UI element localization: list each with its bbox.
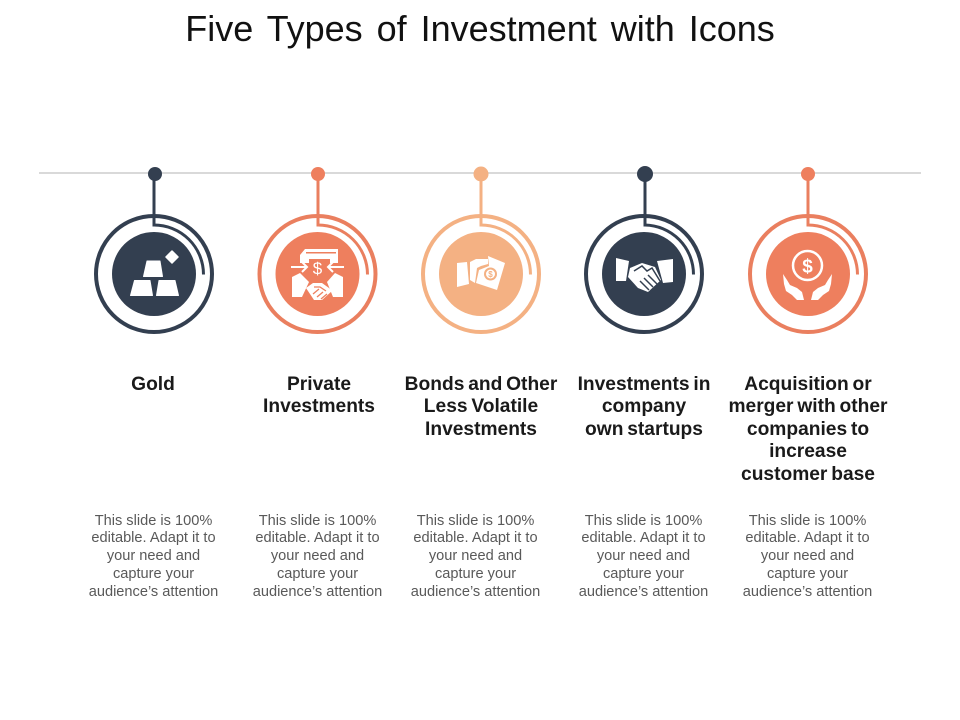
text: bonds description: your need and	[429, 548, 522, 564]
heading: startups	[578, 374, 710, 440]
text: bonds description	[411, 512, 540, 600]
heading: private investments	[263, 374, 375, 417]
text: gold description	[89, 512, 218, 600]
icon: handshake	[616, 258, 673, 292]
text: bonds description: editable. Adapt it to	[413, 530, 538, 546]
title: Five Types of Investment with Icons	[185, 8, 775, 49]
text: acquisition description: audience’s attention	[743, 584, 872, 600]
text: gold description: audience’s attention	[89, 584, 218, 600]
heading: acquisition: merger with other	[728, 396, 888, 417]
heading: startups: company	[602, 396, 686, 417]
node: gold	[96, 167, 212, 332]
text: startups description: audience’s attention	[579, 584, 708, 600]
heading: acquisition: Acquisition or	[744, 374, 872, 395]
heading: acquisition	[728, 374, 888, 485]
icon: gold bars	[130, 251, 178, 296]
text: private description: your need and	[271, 548, 364, 564]
node: bonds	[423, 166, 539, 332]
text: bonds description: This slide is 100%	[417, 512, 534, 528]
icon: hands holding dollar coin: $	[802, 256, 813, 278]
text: acquisition description	[743, 512, 872, 600]
heading: acquisition: increase	[769, 441, 847, 462]
heading: bonds: Less Volatile	[424, 396, 538, 417]
heading: bonds: Investments	[425, 419, 537, 440]
heading: private investments: Investments	[263, 396, 375, 417]
text: startups description	[579, 512, 708, 600]
text: private description: editable. Adapt it to	[255, 530, 380, 546]
text: private description: audience’s attention	[253, 584, 382, 600]
text: private description: capture your	[277, 566, 358, 582]
text: acquisition description: editable. Adapt it to	[745, 530, 870, 546]
text: gold description: editable. Adapt it to	[91, 530, 216, 546]
heading: bonds	[405, 374, 558, 440]
heading: startups: Investments in	[578, 374, 710, 395]
text: startups description: This slide is 100%	[585, 512, 702, 528]
text: private description	[253, 512, 382, 600]
node: private investments	[260, 167, 376, 332]
text: startups description: your need and	[597, 548, 690, 564]
node: acquisition	[750, 167, 866, 332]
text: private description: This slide is 100%	[259, 512, 376, 528]
heading: private investments: Private	[287, 374, 351, 395]
heading: acquisition: companies to	[747, 419, 869, 440]
timeline line	[39, 172, 921, 174]
heading: startups: own startups	[585, 419, 703, 440]
text: acquisition description: This slide is 100%	[749, 512, 866, 528]
text: gold description: your need and	[107, 548, 200, 564]
heading: acquisition: customer base	[741, 464, 875, 485]
text: startups description: capture your	[603, 566, 684, 582]
icon: deal with money	[291, 249, 344, 300]
icon: hand with banknote	[457, 256, 505, 290]
text: startups description: editable. Adapt it to	[581, 530, 706, 546]
heading: bonds: Bonds and Other	[405, 374, 557, 395]
text: acquisition description: your need and	[761, 548, 854, 564]
text: bonds description: audience’s attention	[411, 584, 540, 600]
text: gold description: This slide is 100%	[95, 512, 212, 528]
icon: hand with banknote: $	[488, 270, 493, 279]
icon: hands holding dollar coin	[783, 251, 832, 300]
heading: gold: Gold	[131, 374, 175, 395]
node: startups	[586, 166, 702, 332]
text: acquisition description: capture your	[767, 566, 848, 582]
icon: deal with money: $	[313, 259, 323, 278]
text: gold description: capture your	[113, 566, 194, 582]
text: bonds description: capture your	[435, 566, 516, 582]
